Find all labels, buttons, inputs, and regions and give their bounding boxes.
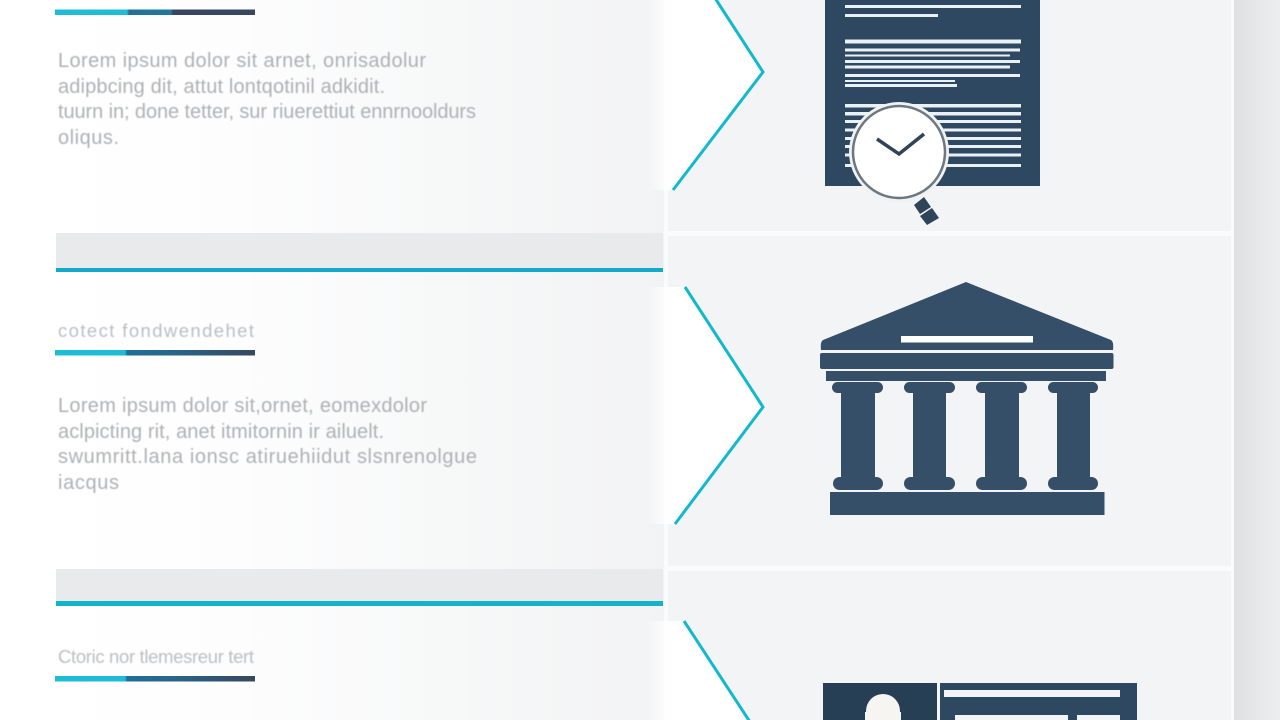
section 3 header band — [56, 569, 663, 606]
section 2 heading: cotect fondwendehet — [58, 320, 254, 341]
icon: document with magnifier and clock — [825, 0, 1040, 225]
section 1 body text: oliqus. — [58, 127, 119, 149]
section 2 body text — [58, 395, 477, 494]
section 2 body text: Lorem ipsum dolor sit,ornet, eomexdolor — [58, 395, 427, 417]
section 1 body text: Lorem ipsum dolor sit arnet, onrisadolur — [58, 50, 426, 72]
chevron: section 3 — [646, 621, 752, 720]
section 2 body text: iacqus — [58, 472, 119, 494]
card photo side — [823, 683, 937, 720]
card lines — [944, 690, 1120, 720]
section 1 body text: tuurn in; done tetter, sur riuerettiut ennrnooldurs — [58, 101, 476, 123]
section 2 header band — [56, 233, 663, 272]
magnifier handle — [914, 197, 939, 225]
right column gutter — [664, 0, 1234, 720]
icon: classical bank building — [820, 282, 1114, 515]
clock hands — [877, 134, 924, 154]
panel: section 3 icon background — [668, 571, 1231, 720]
right edge strip — [1234, 0, 1280, 720]
column 4 — [1048, 382, 1098, 490]
chevron: section 1 — [646, 0, 763, 190]
document text lines — [845, 5, 1021, 167]
section 2 body text: swumritt.lana ionsc atiruehiidut slsnrenolgue — [58, 446, 477, 468]
section 1 body text — [58, 50, 476, 149]
roof plaque — [901, 336, 1033, 342]
column 1 — [832, 382, 883, 490]
chevron: section 2 — [646, 287, 763, 524]
magnifier lens — [849, 102, 949, 202]
icon: ID card — [823, 683, 1137, 720]
section 3 heading: Ctoric nor tlemesreur tert — [58, 646, 254, 667]
section 2 body text: aclpicting rit, anet itmitornin ir ailuelt. — [58, 421, 384, 443]
left column background — [56, 0, 664, 720]
portrait silhouette — [865, 694, 901, 720]
column 3 — [976, 382, 1027, 490]
card detail side — [940, 683, 1137, 720]
column 2 — [904, 382, 955, 490]
section 2 accent bar — [55, 350, 255, 356]
section 1 accent bar — [55, 10, 255, 15]
panel: section 1 icon background — [668, 0, 1231, 231]
document sheet — [825, 0, 1040, 186]
panel: section 2 icon background — [668, 236, 1231, 566]
roof — [821, 282, 1113, 350]
plinth — [830, 492, 1104, 515]
section 3 accent bar — [55, 676, 255, 682]
entablature — [820, 353, 1114, 369]
section 1 body text: adipbcing dit, attut lontqotinil adkidit. — [58, 76, 385, 98]
